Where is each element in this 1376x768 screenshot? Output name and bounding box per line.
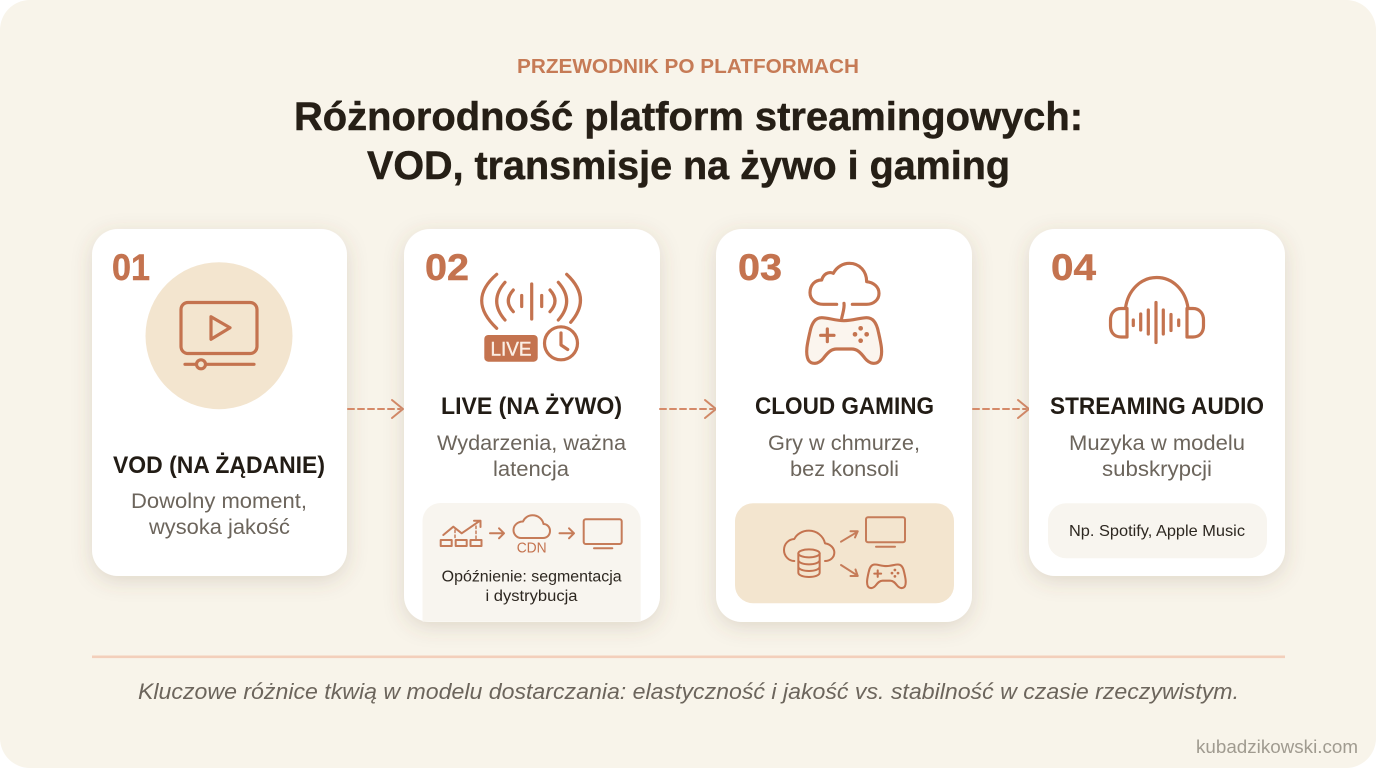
latency caption: Opóźnienie: segmentacja <box>442 569 622 586</box>
description: Cloud gaming <box>768 431 920 481</box>
icon: live broadcast <box>482 274 580 362</box>
number 04: 04 <box>1051 247 1096 288</box>
title: Różnorodność platform streamingowych: <box>294 95 1083 139</box>
arrow: segments to CDN <box>490 528 504 538</box>
arrow: 02 to 03 <box>660 400 716 418</box>
icon: live broadcast: LIVE <box>490 340 532 360</box>
icon: monitor <box>584 519 622 548</box>
examples pill <box>1048 503 1267 558</box>
latency caption: i dystrybucja <box>486 588 578 605</box>
heading: Streaming audio: STREAMING AUDIO <box>1050 393 1264 420</box>
panel: 02 LIVE <box>404 229 660 622</box>
description: Streaming audio: Muzyka w modelu <box>1069 431 1245 455</box>
arrow: 03 to 04 <box>973 400 1029 418</box>
description: Streaming audio <box>1069 431 1245 481</box>
latency diagram panel <box>422 503 641 622</box>
description: VOD <box>131 489 307 539</box>
description: VOD: wysoka jakość <box>148 515 290 539</box>
icon: segments <box>441 521 482 546</box>
examples pill: Np. Spotify, Apple Music <box>1069 523 1245 540</box>
heading: Cloud gaming: CLOUD GAMING <box>755 393 934 420</box>
description: VOD: Dowolny moment, <box>131 489 307 513</box>
heading: LIVE: LIVE (NA ŻYWO) <box>441 393 622 420</box>
icon: gamepad <box>867 565 906 588</box>
title: VOD, transmisje na żywo i gaming <box>367 144 1010 188</box>
arrow: 01 to 02 <box>348 400 403 418</box>
latency caption <box>442 569 622 605</box>
description: LIVE <box>437 431 626 481</box>
panel: 01 VOD <box>92 229 347 576</box>
icon: headphones with sound wave <box>1110 278 1204 342</box>
icon: video player <box>146 262 292 409</box>
cloud diagram panel <box>735 503 954 603</box>
icon: cloud with gamepad <box>807 263 882 363</box>
description: Cloud gaming: bez konsoli <box>790 457 899 481</box>
description: Streaming audio: subskrypcji <box>1102 457 1212 481</box>
watermark: kubadzikowski.com <box>1196 737 1358 757</box>
title <box>294 95 1083 188</box>
icon: cloud database <box>784 531 834 577</box>
number 02: 02 <box>425 247 469 288</box>
eyebrow label: PRZEWODNIK PO PLATFORMACH <box>517 55 859 78</box>
description: LIVE: latencja <box>493 457 569 481</box>
CDN label: CDN <box>517 541 547 557</box>
arrow: CDN to monitor <box>560 528 574 538</box>
icon: CDN cloud <box>514 515 550 538</box>
arrow: to monitor <box>841 531 858 542</box>
number 03: 03 <box>738 247 782 288</box>
panel: 04 Streaming audio <box>1029 229 1285 576</box>
panel: 03 Cloud gaming <box>716 229 972 622</box>
description: LIVE: Wydarzenia, ważna <box>437 431 626 455</box>
arrow: to gamepad <box>841 565 858 576</box>
heading: VOD: VOD (NA ŻĄDANIE) <box>113 452 325 479</box>
conclusion text: Kluczowe różnice tkwią w modelu dostarczania: elastyczność i jakość vs. stabilność w czasie rzeczywistym. <box>138 679 1239 704</box>
number 01: 01 <box>112 247 150 288</box>
description: Cloud gaming: Gry w chmurze, <box>768 431 920 455</box>
icon: monitor <box>866 517 905 547</box>
